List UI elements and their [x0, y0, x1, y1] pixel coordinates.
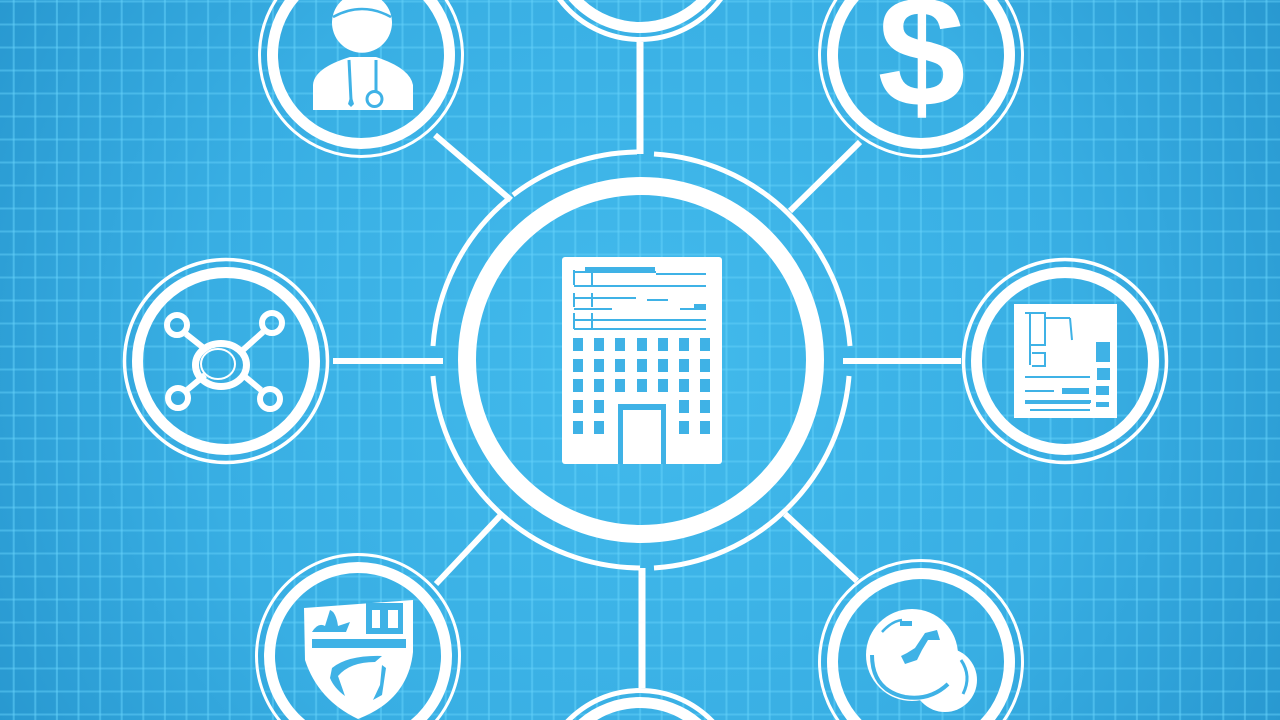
windows [573, 338, 710, 464]
node: top partial [557, 0, 723, 42]
node: finance [818, 0, 1024, 158]
icon: document sheet [1014, 304, 1117, 418]
icon: hospital building with document [562, 257, 722, 464]
node: coins [818, 559, 1024, 720]
icon: crest shield [304, 600, 413, 719]
node: doctor [258, 0, 464, 158]
node: shield [255, 553, 461, 720]
node: network [124, 260, 328, 462]
connector lines [333, 42, 961, 688]
node: bottom partial [565, 688, 715, 720]
icon: doctor with stethoscope [313, 0, 413, 110]
central hub rings [433, 152, 850, 568]
icon: network hub [167, 313, 282, 409]
node: report [964, 260, 1166, 462]
icon: coin stack [866, 609, 977, 712]
document lines on building [574, 267, 706, 329]
